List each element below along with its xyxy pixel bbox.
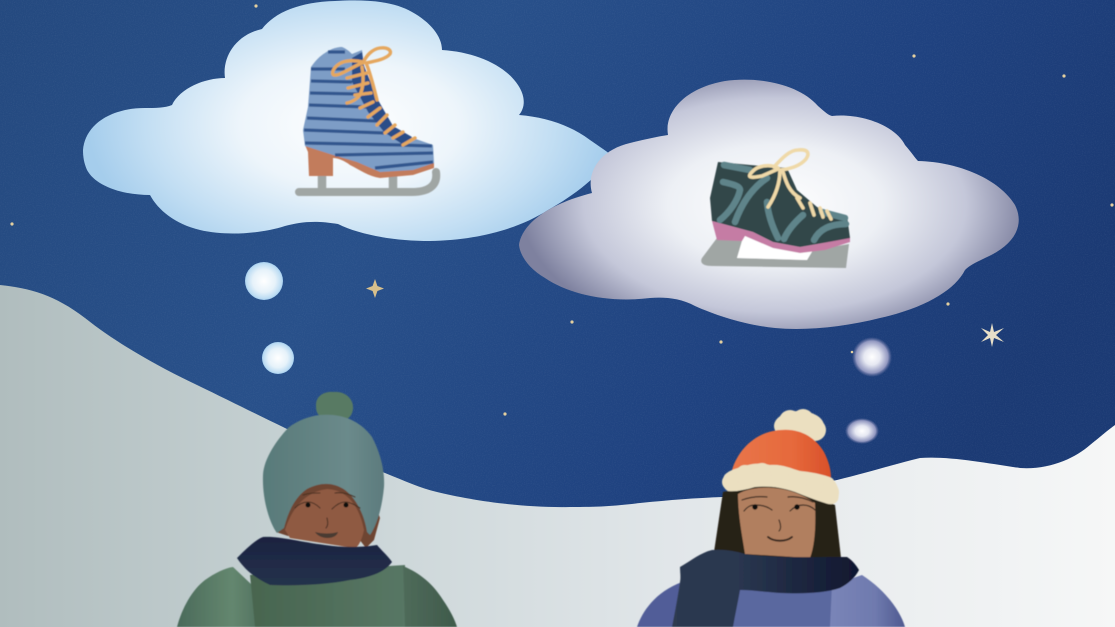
skate camo pattern [720, 165, 846, 240]
skate blade [701, 238, 849, 268]
eyes, brows, nose and mouth [742, 497, 815, 541]
skate laces [333, 48, 415, 145]
skate boot [303, 47, 434, 172]
hat [732, 430, 831, 478]
thought bubbles: right person [845, 337, 892, 444]
face [738, 488, 815, 558]
ice skate: blue striped [299, 47, 436, 192]
skate tongue [352, 52, 412, 146]
pompom [316, 392, 353, 419]
thought cloud: right person [519, 80, 1019, 329]
skate blade [299, 172, 436, 192]
jacket [177, 565, 457, 627]
stars [10, 4, 1114, 416]
ice skate: green camo [701, 150, 850, 268]
person: right, orange hat and blue jacket [637, 409, 905, 627]
skate white window [737, 234, 813, 260]
skate stripes [304, 52, 433, 168]
skate boot [710, 162, 850, 247]
pompom [774, 409, 826, 441]
skate heel and sole [712, 221, 850, 253]
hat [263, 415, 384, 535]
hair [276, 475, 380, 548]
face [285, 489, 364, 548]
scarf [237, 537, 392, 585]
skate laces [750, 150, 831, 219]
scarf [672, 550, 859, 627]
thought bubbles: left person [245, 262, 294, 374]
hat trim [722, 463, 839, 504]
snowy hills [0, 285, 1115, 627]
hair [714, 480, 841, 565]
eyes, brows, nose and mouth [295, 493, 360, 538]
person: left, green hat and jacket [177, 392, 457, 627]
jacket [637, 575, 905, 627]
skate heel and sole [305, 145, 434, 178]
thought cloud: left person [83, 0, 612, 241]
